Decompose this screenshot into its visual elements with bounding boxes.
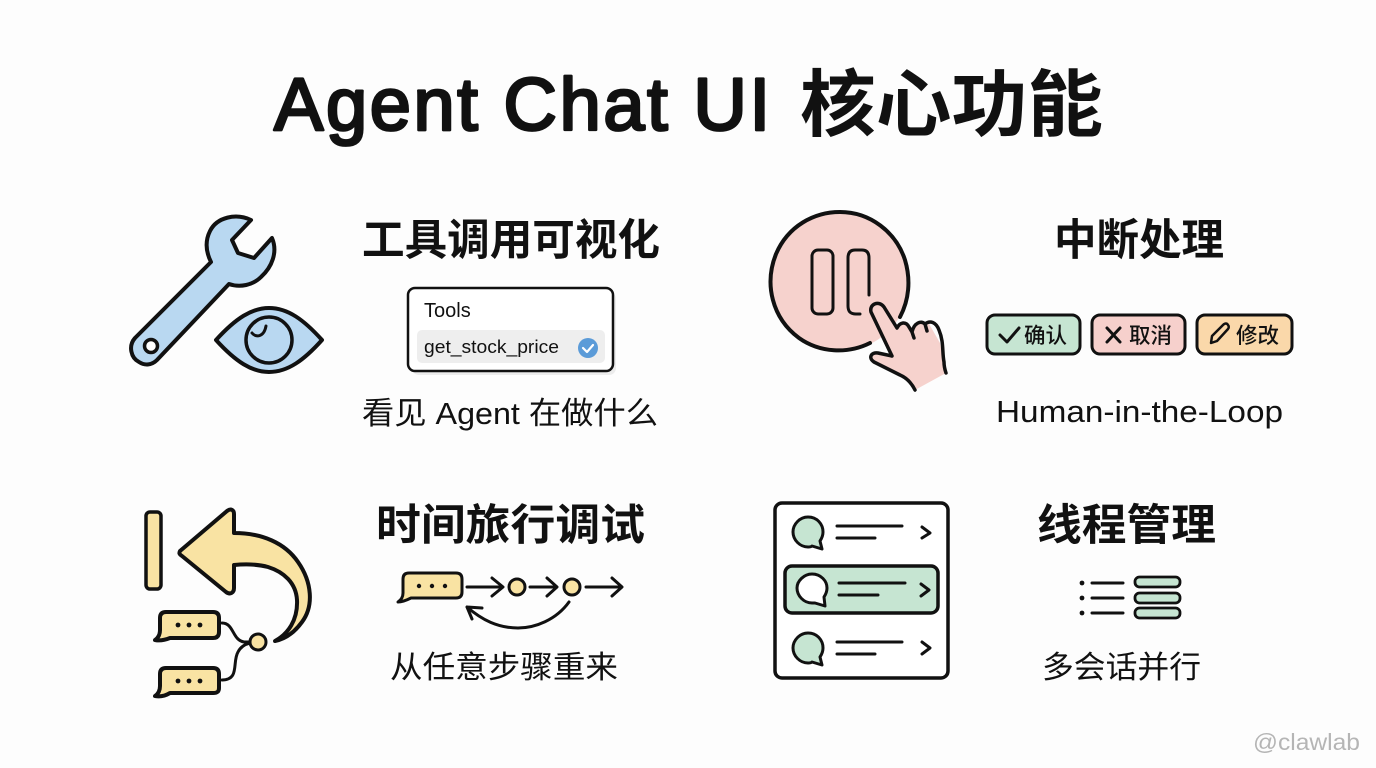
card heading: Tools <box>424 300 471 322</box>
title: Agent Chat UI <box>274 63 770 146</box>
icon: wrench hole <box>144 340 158 352</box>
icon: eye <box>216 308 322 372</box>
title: 核心功能 <box>800 65 1103 146</box>
icon: pause button <box>771 212 909 351</box>
subtitle: 多会话并行 <box>1042 650 1201 685</box>
heading: 中断处理 <box>1054 217 1224 265</box>
button: modify: 修改 <box>1236 324 1279 348</box>
icon: pointing hand <box>871 303 946 390</box>
icon: message bubble top <box>155 612 219 640</box>
button: modify <box>1197 315 1292 354</box>
title <box>274 63 1103 146</box>
thread list frame <box>775 503 948 678</box>
panel: tool call visualization <box>131 217 660 431</box>
heading: 工具调用可视化 <box>362 217 660 265</box>
button: confirm: 确认 <box>1024 324 1067 348</box>
thread item 2 selected <box>785 566 938 613</box>
tool row <box>417 330 605 363</box>
icon: wrench <box>131 217 274 364</box>
tools card <box>408 288 616 375</box>
watermark: @clawlab <box>1253 729 1360 755</box>
panel: thread management <box>775 502 1216 685</box>
subtitle: Human-in-the-Loop <box>996 394 1283 429</box>
button: cancel: 取消 <box>1129 324 1172 348</box>
icon: checkpoint bar <box>146 512 161 589</box>
thread item 1 <box>793 517 930 549</box>
thread item 3 <box>793 633 930 665</box>
heading: 线程管理 <box>1037 502 1216 550</box>
icon: back arrow <box>179 510 310 641</box>
timeline diagram <box>398 573 622 628</box>
icon: list and stacked bars <box>1080 577 1180 618</box>
tool row: get_stock_price <box>424 336 559 358</box>
button: cancel <box>1092 315 1185 354</box>
panel: time travel debugging <box>146 502 645 696</box>
button: confirm <box>987 315 1080 354</box>
heading: 时间旅行调试 <box>376 502 645 550</box>
icon: message bubble bottom <box>155 668 219 696</box>
icon: branch connector <box>222 623 266 680</box>
subtitle: 从任意步骤重来 <box>390 650 618 685</box>
panel: interrupt handling <box>771 212 1292 429</box>
subtitle: 看见 Agent 在做什么 <box>362 396 658 431</box>
